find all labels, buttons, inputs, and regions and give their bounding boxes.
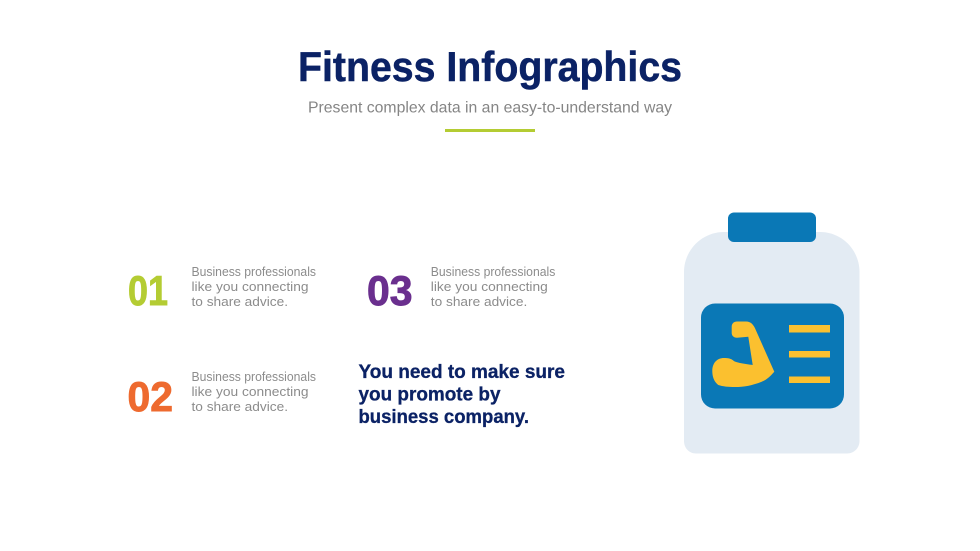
item 03 text: to share advice. <box>431 294 527 309</box>
item 02 text: Business professionals <box>192 369 316 384</box>
item 02 text: to share advice. <box>192 399 288 414</box>
label line 3 <box>789 376 830 383</box>
callout: business company. <box>358 406 529 428</box>
jar label <box>701 304 844 408</box>
item 01 text: to share advice. <box>192 294 288 309</box>
item 01 text: like you connecting <box>192 279 308 294</box>
title: Fitness Infographics <box>298 43 682 90</box>
icon: supplement jar with muscle arm <box>684 212 860 454</box>
jar body <box>684 232 860 454</box>
icon: flexed arm <box>712 322 774 387</box>
item 03 text: Business professionals <box>431 264 556 279</box>
callout: You need to make sure <box>358 361 565 383</box>
number 01: 01 <box>128 267 168 314</box>
item 02 <box>128 369 320 420</box>
item 03 <box>367 264 559 314</box>
jar lid <box>728 212 816 242</box>
subtitle: Present complex data in an easy-to-understand way <box>308 100 672 116</box>
item 02 text: like you connecting <box>192 384 308 399</box>
item 01 <box>128 264 320 314</box>
number 03: 03 <box>367 267 412 314</box>
callout: you promote by <box>358 384 501 406</box>
label line 1 <box>789 325 830 332</box>
title underline accent <box>445 129 535 132</box>
item 01 text: Business professionals <box>192 264 316 279</box>
number 02: 02 <box>128 373 173 420</box>
item 03 text: like you connecting <box>431 279 548 294</box>
label line 2 <box>789 351 830 358</box>
